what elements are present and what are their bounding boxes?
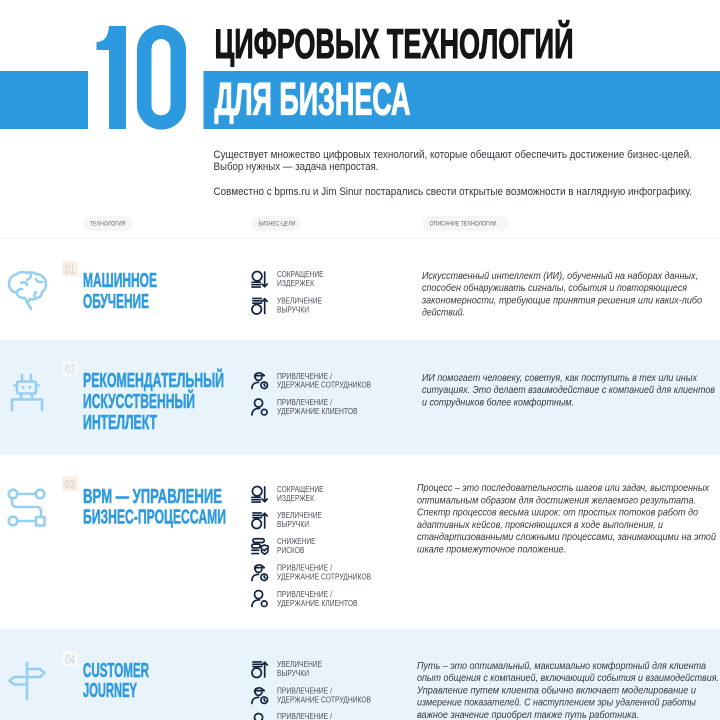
heading: МАШИННОЕ	[83, 270, 157, 292]
description	[417, 482, 716, 556]
intro text	[214, 149, 692, 198]
heading: БИЗНЕС-ПРОЦЕССАМИ	[83, 506, 226, 528]
goal: revenue growth	[252, 296, 322, 314]
number badge 01	[62, 261, 78, 277]
column header: description: ОПИСАНИЕ ТЕХНОЛОГИИ	[430, 222, 496, 228]
big number 10	[96, 25, 186, 130]
goal: clients	[252, 398, 358, 416]
column header: technology: ТЕХНОЛОГИЯ	[90, 222, 126, 228]
goal: risk reduction: СНИЖЕНИЕ	[277, 537, 316, 546]
big number 10: 10	[100, 6, 184, 155]
description: и сотрудников более комфортным.	[422, 396, 574, 408]
goal: cost reduction	[252, 270, 324, 288]
goal: revenue growth: ВЫРУЧКИ	[277, 306, 309, 314]
description: действий.	[422, 307, 465, 319]
heading: ИНТЕЛЛЕКТ	[83, 412, 157, 434]
title banner left bar	[0, 71, 88, 129]
goal: clients: УДЕРЖАНИЕ КЛИЕНТОВ	[277, 407, 358, 416]
heading	[83, 660, 149, 702]
goal: cost reduction: СОКРАЩЕНИЕ	[277, 485, 324, 494]
goal: revenue growth: УВЕЛИЧЕНИЕ	[277, 296, 322, 306]
number badge 03: 03	[65, 478, 75, 492]
description	[416, 660, 719, 720]
goal: cost reduction	[252, 485, 324, 503]
intro text: Выбор нужных — задача непростая.	[214, 161, 378, 173]
panel: 03 BPM	[0, 455, 720, 629]
icon: process path	[9, 490, 44, 526]
panel: 04 customer journey	[0, 629, 720, 720]
heading: ИСКУССТВЕННЫЙ	[83, 389, 195, 413]
goal: employees: ПРИВЛЕЧЕНИЕ /	[277, 686, 333, 696]
number badge 04	[62, 651, 78, 667]
heading: BPM — УПРАВЛЕНИЕ	[83, 486, 222, 508]
number badge 01: 01	[65, 262, 75, 276]
title banner right bar	[204, 71, 720, 129]
goal: revenue growth: УВЕЛИЧЕНИЕ	[277, 511, 322, 520]
goal: revenue growth: ВЫРУЧКИ	[277, 520, 309, 529]
goal: employees	[252, 372, 371, 390]
panel: 01 machine learning	[0, 239, 720, 340]
number badge 04: 04	[65, 652, 75, 666]
heading: CUSTOMER	[83, 660, 149, 682]
column header: technology	[83, 216, 133, 231]
number badge 02	[62, 361, 78, 377]
panel: 02 recommender AI	[0, 340, 720, 455]
goal: clients: ПРИВЛЕЧЕНИЕ /	[277, 590, 333, 599]
goal: employees: УДЕРЖАНИЕ СОТРУДНИКОВ	[277, 572, 371, 582]
heading: JOURNEY	[83, 680, 137, 702]
goal: cost reduction: ИЗДЕРЖЕК	[277, 494, 314, 503]
goal: risk reduction	[252, 537, 316, 555]
goal: clients: УДЕРЖАНИЕ КЛИЕНТОВ	[277, 599, 358, 608]
goal: cost reduction: ИЗДЕРЖЕК	[277, 279, 314, 288]
heading	[83, 368, 224, 434]
goal: clients	[252, 712, 333, 720]
goal: employees: ПРИВЛЕЧЕНИЕ /	[277, 372, 333, 381]
description	[421, 270, 702, 319]
icon: signpost	[10, 663, 44, 699]
description	[422, 372, 715, 408]
heading: РЕКОМЕНДАТЕЛЬНЫЙ	[83, 368, 224, 392]
goal: employees	[252, 564, 371, 582]
description: адаптивных кейсов, проясняющихся в ходе выполнения, и	[417, 519, 663, 531]
goal: revenue growth	[252, 511, 322, 529]
column header: business goals	[251, 216, 301, 231]
goal: employees: УДЕРЖАНИЕ СОТРУДНИКОВ	[277, 696, 371, 704]
column header: description	[422, 216, 508, 231]
icon: robot	[12, 375, 42, 410]
number badge 03	[62, 476, 78, 492]
number badge 02: 02	[65, 362, 75, 376]
goal: risk reduction: РИСКОВ	[277, 546, 304, 555]
goal: employees: ПРИВЛЕЧЕНИЕ /	[277, 564, 333, 572]
goal: revenue growth	[252, 660, 322, 678]
goal: revenue growth: ВЫРУЧКИ	[277, 669, 309, 678]
heading: ОБУЧЕНИЕ	[83, 291, 149, 313]
goal: revenue growth: УВЕЛИЧЕНИЕ	[277, 660, 322, 669]
heading	[83, 270, 157, 313]
goal: employees: УДЕРЖАНИЕ СОТРУДНИКОВ	[277, 380, 371, 390]
goal: clients	[252, 590, 358, 608]
description: шкале промежуточное положение.	[417, 544, 566, 556]
goal: cost reduction: СОКРАЩЕНИЕ	[277, 270, 324, 279]
title line 2: ДЛЯ БИЗНЕСА	[214, 74, 410, 124]
goal: employees	[252, 686, 371, 704]
icon: brain	[9, 272, 46, 309]
goal: clients: ПРИВЛЕЧЕНИЕ /	[277, 398, 333, 407]
column header: business goals: БИЗНЕС-ЦЕЛИ	[258, 222, 296, 228]
heading	[83, 486, 226, 528]
